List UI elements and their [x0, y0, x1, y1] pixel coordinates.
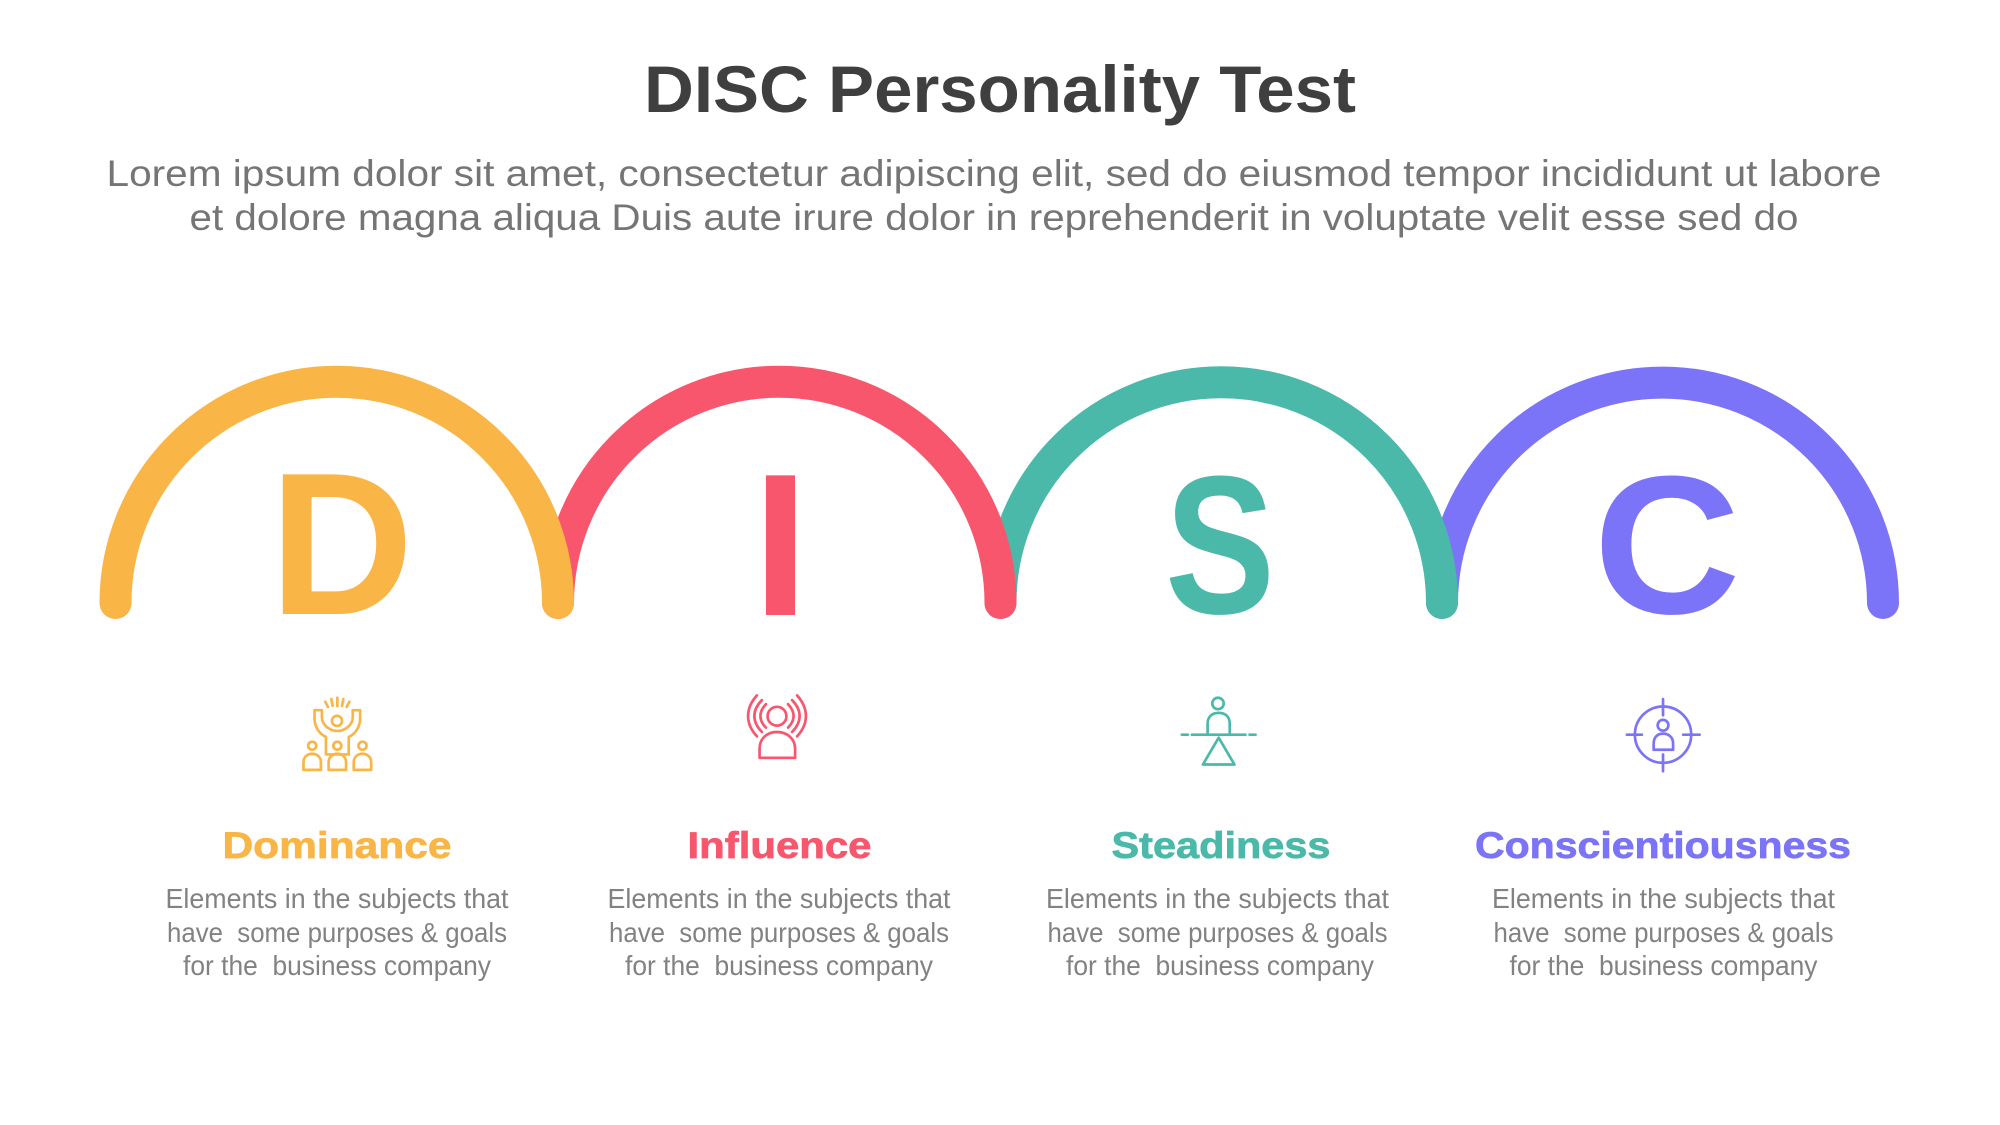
description: Steadiness: for the business company: [1066, 950, 1374, 981]
arc and letter: D: [116, 382, 558, 658]
icon: person in target crosshair: [1627, 699, 1700, 771]
arc and letter: C: [1442, 383, 1883, 655]
description: Influence: [608, 883, 951, 981]
icon: cheering leader with group: [303, 698, 371, 770]
heading: Dominance: Dominance: [222, 825, 452, 866]
description: Steadiness: have some purposes & goals: [1048, 917, 1388, 948]
arc and letter: I: [558, 382, 1000, 659]
description: Conscientiousness: Elements in the subjects that: [1492, 883, 1835, 914]
description: Dominance: [166, 883, 509, 981]
panel: Influence: [608, 695, 951, 981]
description: Conscientiousness: for the business company: [1510, 950, 1818, 981]
description: Dominance: for the business company: [183, 950, 491, 981]
description: Conscientiousness: have some purposes & goals: [1494, 917, 1834, 948]
heading: Conscientiousness: Conscientiousness: [1475, 825, 1851, 866]
arc and letter: S: [1000, 382, 1442, 655]
description: Steadiness: Elements in the subjects that: [1046, 883, 1389, 914]
subtitle text block: et dolore magna aliqua Duis aute irure dolor in reprehenderit in voluptate velit esse sed do: [190, 197, 1798, 238]
panel: Conscientiousness: [1475, 699, 1851, 981]
icon: person broadcasting signal: [748, 695, 806, 758]
description: Influence: for the business company: [625, 950, 933, 981]
description: Steadiness: [1046, 883, 1389, 981]
icon: person balancing on triangle: [1182, 698, 1256, 764]
heading: Influence: Influence: [688, 825, 872, 866]
heading: Steadiness: Steadiness: [1112, 825, 1330, 866]
description: Dominance: have some purposes & goals: [167, 917, 507, 948]
panel: Steadiness: [1046, 698, 1389, 981]
subtitle text block: [106, 153, 1882, 238]
description: Influence: Elements in the subjects that: [608, 883, 951, 914]
arc and letter: S: S: [1165, 435, 1275, 655]
arc and letter: I: I: [752, 432, 808, 659]
panel: Dominance: [166, 698, 509, 981]
title: DISC Personality Test: [644, 52, 1356, 126]
description: Dominance: Elements in the subjects that: [166, 883, 509, 914]
arc and letter: D: D: [270, 431, 414, 658]
arc and letter: C: C: [1594, 435, 1740, 655]
description: Influence: have some purposes & goals: [609, 917, 949, 948]
subtitle text block: Lorem ipsum dolor sit amet, consectetur adipiscing elit, sed do eiusmod tempor incididunt ut labore: [106, 153, 1882, 194]
description: Conscientiousness: [1492, 883, 1835, 981]
